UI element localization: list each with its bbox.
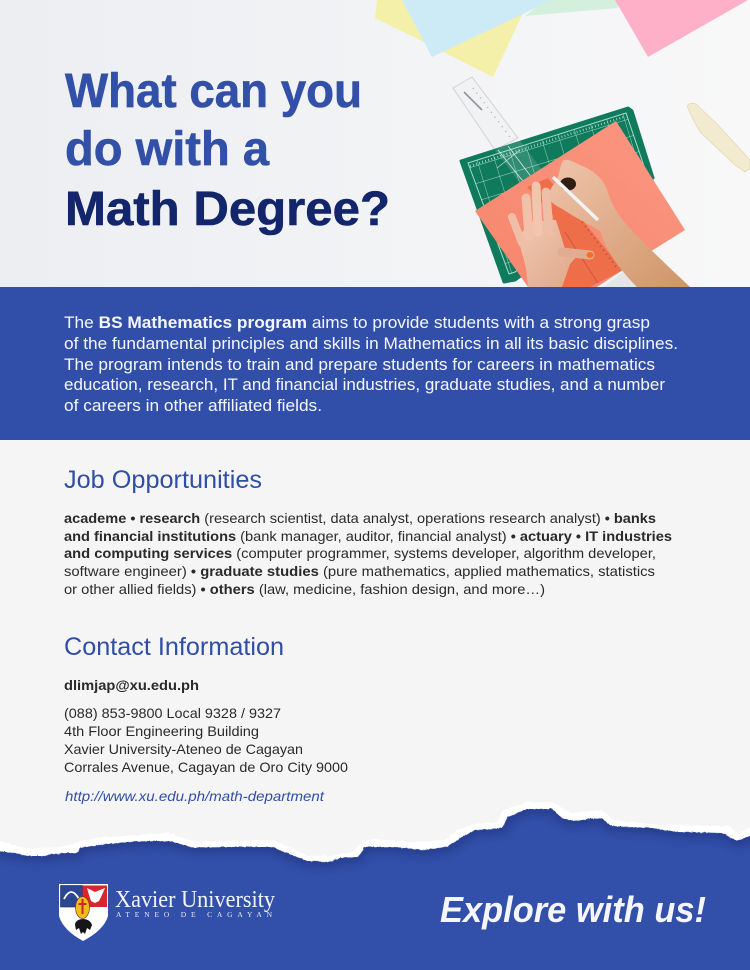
thumb	[562, 252, 590, 255]
university wordmark: Xavier University	[115, 887, 275, 913]
job opportunities list: and financial institutions (bank manager, auditor, financial analyst) • actuary • IT industries	[64, 528, 672, 544]
ruler scale marks	[473, 88, 513, 141]
red monogram cross	[78, 899, 86, 914]
torn white paper edge	[0, 802, 750, 880]
program description: of the fundamental principles and skills in Mathematics in all its basic disciplines.	[64, 335, 678, 353]
job opportunities list: or other allied fields) • others (law, medicine, fashion design, and more…)	[64, 581, 545, 597]
ruler over mat	[495, 140, 541, 182]
contact address: 4th Floor Engineering Building	[64, 723, 259, 739]
header photo: desk with papers, mat and hands	[375, 0, 750, 287]
contact address	[64, 705, 348, 775]
crescent	[64, 892, 79, 899]
index finger	[546, 192, 549, 232]
program description: The BS Mathematics program aims to provide students with a strong grasp	[64, 314, 650, 332]
page title: What can you	[65, 65, 362, 118]
contact address: Xavier University-Ateneo de Cagayan	[64, 741, 303, 757]
footer blue area	[0, 809, 750, 970]
program description: education, research, IT and financial industries, graduate studies, and a number	[64, 376, 666, 394]
bone folder	[687, 103, 750, 172]
page title: Math Degree?	[65, 183, 390, 236]
paper: mint green	[525, 0, 618, 16]
black eagle	[75, 919, 92, 934]
pencil	[553, 177, 598, 220]
job opportunities list	[64, 510, 672, 597]
ruler over salmon paper	[527, 178, 623, 287]
university crest	[59, 884, 108, 941]
ruler upper part	[453, 77, 518, 150]
program description: of careers in other affiliated fields.	[64, 397, 322, 415]
torn paper footer	[0, 802, 750, 970]
salmon paper	[475, 121, 685, 287]
heading: contact information: Contact Information	[64, 633, 284, 661]
job opportunities list: software engineer) • graduate studies (pure mathematics, applied mathematics, statistics	[64, 563, 655, 579]
page title	[65, 65, 390, 236]
gold medallion	[76, 896, 90, 918]
page title: do with a	[65, 123, 269, 176]
paper: pink	[615, 0, 748, 57]
cutting mat	[461, 108, 653, 282]
red quarter	[82, 886, 107, 907]
blue intro band	[0, 287, 750, 440]
heading: job opportunities: Job Opportunities	[64, 466, 262, 494]
middle finger	[536, 186, 538, 232]
paper: yellow	[375, 0, 522, 77]
slogan: Explore with us!	[440, 889, 706, 930]
gap between fingers	[560, 178, 576, 190]
contact email: dlimjap@xu.edu.ph	[64, 677, 199, 693]
mat tick marks	[470, 117, 624, 166]
contact address: Corrales Avenue, Cagayan de Oro City 9000	[64, 759, 348, 775]
ruler printed label	[464, 92, 482, 110]
orange nail	[586, 252, 594, 258]
ruler bottom white end	[603, 272, 637, 287]
shield base	[59, 884, 108, 941]
ring finger	[526, 198, 529, 236]
website link: http://www.xu.edu.ph/math-department	[65, 788, 325, 804]
program description	[64, 314, 678, 415]
program description: The program intends to train and prepare students for careers in mathematics	[64, 356, 655, 374]
hand and arm: right	[549, 160, 690, 287]
job opportunities list: and computing services (computer programmer, systems developer, algorithm developer,	[64, 545, 656, 561]
pinky finger	[512, 217, 522, 243]
white dove	[87, 888, 105, 903]
contact address: (088) 853-9800 Local 9328 / 9327	[64, 705, 281, 721]
torn edge shadow	[0, 809, 750, 862]
job opportunities list: academe • research (research scientist, data analyst, operations research analyst) • banks	[64, 510, 656, 526]
hand: left	[512, 186, 594, 287]
blue quarter	[60, 886, 82, 907]
university wordmark: ATENEO DE CAGAYAN	[116, 910, 275, 919]
paper: light blue	[402, 0, 550, 57]
header photo background	[0, 0, 750, 287]
